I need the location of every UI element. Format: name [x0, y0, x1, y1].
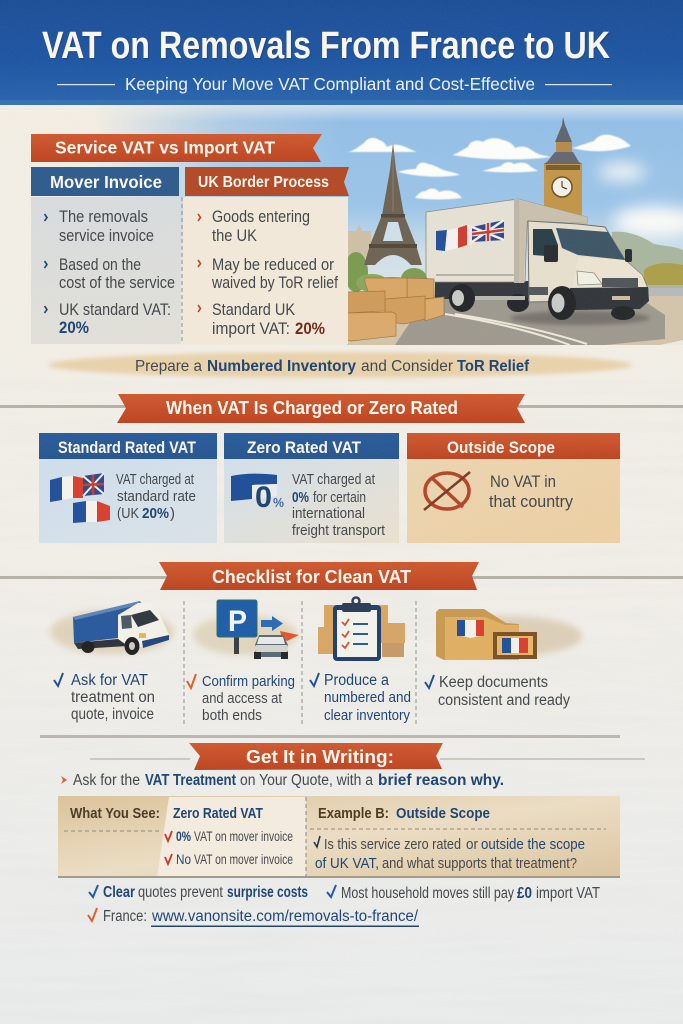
road — [347, 288, 683, 345]
bullet: standard UK import VAT — [198, 301, 325, 338]
bullet: goods entering the UK: Goods entering — [212, 208, 310, 226]
item text — [54, 672, 155, 723]
bullet: standard UK import VAT: 20% — [295, 320, 325, 338]
item text: Ask for VAT — [71, 672, 149, 689]
card text — [292, 472, 385, 539]
item text: clear inventory — [324, 707, 410, 724]
section divider and banner: Get It in Writing — [40, 735, 645, 770]
card text — [489, 473, 574, 511]
bullet: based on cost — [44, 256, 175, 292]
bullet: UK standard VAT: UK standard VAT: — [59, 301, 171, 319]
item text — [425, 674, 570, 709]
column: Zero Rated VAT: VAT on mover invoice — [194, 829, 293, 844]
card text: international — [292, 506, 365, 522]
bullet: UK standard VAT — [44, 301, 171, 337]
section divider and banner: When VAT Is Charged or Zero Rated: When VAT Is Charged or Zero Rated — [166, 397, 458, 418]
item text: treatment on — [71, 689, 155, 706]
section divider and banner: Checklist for Clean VAT — [0, 562, 683, 590]
Big Ben tower — [544, 117, 582, 215]
sky — [111, 105, 683, 314]
instruction line: VAT Treatment — [145, 772, 236, 789]
item text: Keep documents — [439, 674, 548, 691]
item text: numbered and — [324, 689, 411, 706]
card heading: Outside Scope — [447, 439, 555, 457]
card heading — [224, 433, 399, 459]
instruction line: Ask for the — [73, 772, 140, 789]
clouds — [347, 135, 631, 200]
column: Zero Rated VAT: 0% — [176, 829, 191, 844]
bullet: goods entering the UK — [198, 208, 310, 245]
column: Zero Rated VAT: VAT on mover invoice — [194, 852, 293, 867]
brush strip: inventory tip: Prepare a — [135, 358, 202, 375]
bullet: based on cost: Based on the — [59, 256, 141, 274]
takeaway: France link: France: — [103, 908, 147, 925]
card text: ) — [170, 506, 175, 522]
icon: French and UK flags — [50, 473, 110, 523]
item text: quote, invoice — [71, 706, 154, 723]
column: Example B Outside Scope: Is this service zero rated — [324, 837, 461, 853]
section divider and banner: Get It in Writing: Get It in Writing: — [246, 746, 394, 767]
takeaway: clear quotes: surprise costs — [227, 884, 308, 901]
hero scene: Paris and London with removals van — [111, 105, 683, 346]
bullet: ToR relief — [198, 256, 338, 292]
card heading: Standard Rated VAT — [58, 439, 196, 457]
card: Outside Scope — [407, 433, 620, 543]
comparison table — [58, 796, 620, 878]
section divider and banner: When VAT Is Charged or Zero Rated — [0, 394, 683, 423]
checklist item: ask for VAT treatment — [50, 601, 174, 723]
section divider and banner: Checklist for Clean VAT: Checklist for Clean VAT — [212, 566, 412, 587]
card text — [116, 472, 196, 522]
checklist item: confirm parking — [187, 600, 299, 724]
card text: (UK — [117, 506, 139, 522]
bullet: removals service invoice — [44, 208, 154, 245]
brush strip: inventory tip — [48, 352, 632, 378]
item text — [187, 673, 295, 724]
card heading — [407, 433, 620, 459]
card heading: Zero Rated VAT — [247, 439, 361, 457]
takeaway: clear quotes — [89, 884, 308, 901]
bullet: goods entering the UK: the UK — [212, 227, 257, 245]
bullet: standard UK import VAT: import VAT: — [212, 320, 290, 338]
brush strip: inventory tip: and Consider — [361, 358, 454, 375]
icon: delivery van — [73, 601, 169, 655]
subtitle: Keeping Your Move VAT Compliant and Cost-Effective — [125, 74, 535, 94]
card text: standard rate — [117, 489, 196, 505]
icon: flag with 0 percent — [231, 474, 284, 514]
card text: freight transport — [292, 523, 385, 539]
card text: that country — [489, 493, 574, 511]
column: Example B Outside Scope: Example B: — [318, 806, 389, 822]
bullet: ToR relief: waived by ToR relief — [211, 274, 338, 292]
bullet: removals service invoice: The removals — [59, 208, 148, 226]
column: Zero Rated VAT: No — [176, 852, 191, 867]
panel heading: UK Border Process: UK Border Process — [198, 174, 329, 191]
icon: flag with 0 percent: 0 — [255, 481, 272, 514]
takeaway: clear quotes: quotes prevent — [138, 884, 224, 901]
icon: flag with 0 percent: % — [273, 495, 284, 510]
card text: No VAT in — [490, 473, 556, 491]
column: Example B Outside Scope: outside the scope — [481, 837, 585, 853]
column: Example B Outside Scope — [314, 806, 585, 872]
hills and trees — [344, 232, 683, 292]
item text: consistent and ready — [438, 692, 570, 709]
item text — [310, 672, 411, 724]
item text: Confirm parking — [202, 673, 295, 690]
item text: and access at — [202, 690, 283, 707]
card: Standard Rated VAT — [39, 433, 217, 543]
takeaway: France link: www.vanonsite.com/removals-to-france/ — [151, 908, 419, 925]
icon: parking sign and car: P — [228, 605, 247, 638]
moving boxes — [347, 278, 444, 341]
panel: Mover Invoice — [31, 167, 181, 344]
instruction line: on Your Quote, with a — [240, 772, 373, 789]
takeaway: clear quotes: Clear — [103, 884, 135, 901]
card text: 0% — [292, 490, 309, 506]
van — [426, 199, 649, 320]
building — [348, 224, 372, 258]
card text: VAT charged at — [116, 472, 194, 488]
item text: Produce a — [324, 672, 389, 689]
card: Zero Rated VAT — [224, 433, 399, 543]
card heading — [39, 433, 217, 459]
column: Zero Rated VAT — [165, 806, 293, 867]
instruction line: brief reason why. — [378, 772, 504, 789]
card text: 20% — [142, 506, 169, 522]
column: Zero Rated VAT: Zero Rated VAT — [173, 806, 263, 822]
panel heading: Mover Invoice — [31, 167, 179, 196]
header band — [0, 0, 683, 105]
icon: document folder with flags — [436, 609, 537, 660]
bullet: ToR relief: May be reduced or — [212, 256, 334, 274]
table label: What You See: What You See: — [70, 806, 160, 822]
card text: for certain — [313, 490, 366, 506]
item text: both ends — [202, 707, 262, 724]
panel: UK Border Process — [182, 167, 349, 344]
Eiffel Tower — [364, 143, 422, 265]
column: Example B Outside Scope: Outside Scope — [396, 806, 490, 822]
brush strip: inventory tip: Numbered Inventory — [207, 358, 356, 375]
takeaway: import VAT: £0 — [517, 885, 532, 902]
bullet: UK standard VAT: 20% — [59, 319, 89, 337]
checklist item: produce an inventory — [310, 598, 411, 724]
van flags — [436, 220, 504, 251]
checklist column dividers — [184, 601, 416, 725]
bullet: based on cost: cost of the service — [59, 274, 175, 292]
bullet: standard UK import VAT: Standard UK — [212, 301, 295, 319]
bullet: removals service invoice: service invoice — [59, 227, 154, 245]
brush strip: inventory tip: ToR Relief — [457, 358, 530, 375]
column: Example B Outside Scope: and what supports that treatment? — [382, 856, 577, 872]
column: Example B Outside Scope: of UK VAT, — [315, 856, 379, 872]
takeaway: import VAT: import VAT — [536, 885, 600, 902]
icon: crossed circle — [424, 472, 470, 510]
panel heading: UK Border Process — [185, 167, 349, 196]
takeaway: import VAT: Most household moves still pay — [341, 885, 514, 902]
section banner: Service VAT vs Import VAT — [31, 134, 322, 162]
card text: VAT charged at — [292, 472, 375, 488]
checklist item: keep documents ready — [425, 609, 582, 709]
icon: clipboard and boxes — [318, 598, 405, 661]
instruction line — [61, 772, 504, 789]
section banner: Service VAT vs Import VAT: Service VAT vs Import VAT — [55, 138, 275, 158]
column: Example B Outside Scope: or — [466, 837, 478, 853]
panel heading: Mover Invoice: Mover Invoice — [50, 172, 162, 192]
